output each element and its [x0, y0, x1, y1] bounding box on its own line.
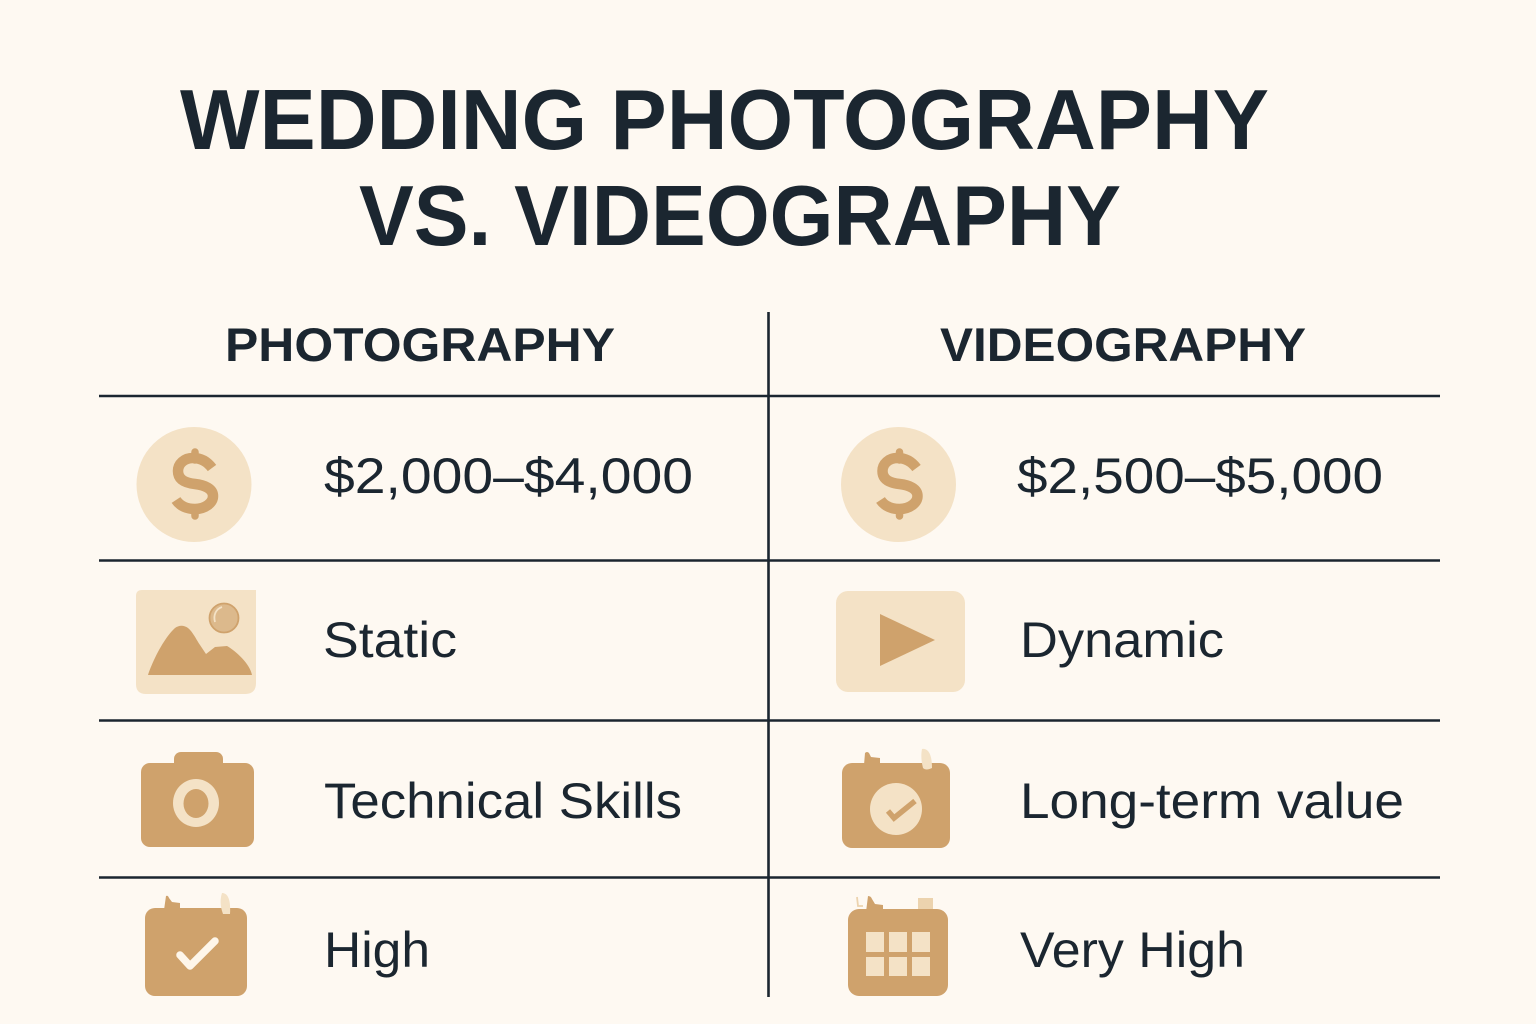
- column heading: videography: VIDEOGRAPHY: [940, 318, 1306, 371]
- icon: play button: [836, 591, 965, 692]
- icon: dollar coin, videography: [841, 427, 956, 542]
- price: photography: $2,000–$4,000: [324, 448, 693, 504]
- title: VS. VIDEOGRAPHY: [359, 169, 1121, 264]
- price: videography: $2,500–$5,000: [1017, 448, 1383, 504]
- style: dynamic: Dynamic: [1020, 612, 1224, 668]
- skills: technical: Technical Skills: [324, 773, 682, 829]
- rating: high: High: [324, 922, 430, 978]
- icon: calendar grid: [848, 896, 948, 996]
- rating: very high: Very High: [1020, 922, 1245, 978]
- icon: camera: [141, 752, 254, 847]
- icon: landscape image: [136, 590, 256, 694]
- column heading: photography: PHOTOGRAPHY: [225, 318, 615, 371]
- style: static: Static: [323, 612, 457, 668]
- icon: calendar badge with check: [842, 749, 950, 848]
- benefit: long-term value: Long-term value: [1020, 773, 1404, 829]
- icon: dollar coin, photography: [136, 427, 252, 542]
- title: [180, 73, 1269, 264]
- icon: calendar with check: [145, 893, 247, 996]
- title: WEDDING PHOTOGRAPHY: [180, 73, 1269, 168]
